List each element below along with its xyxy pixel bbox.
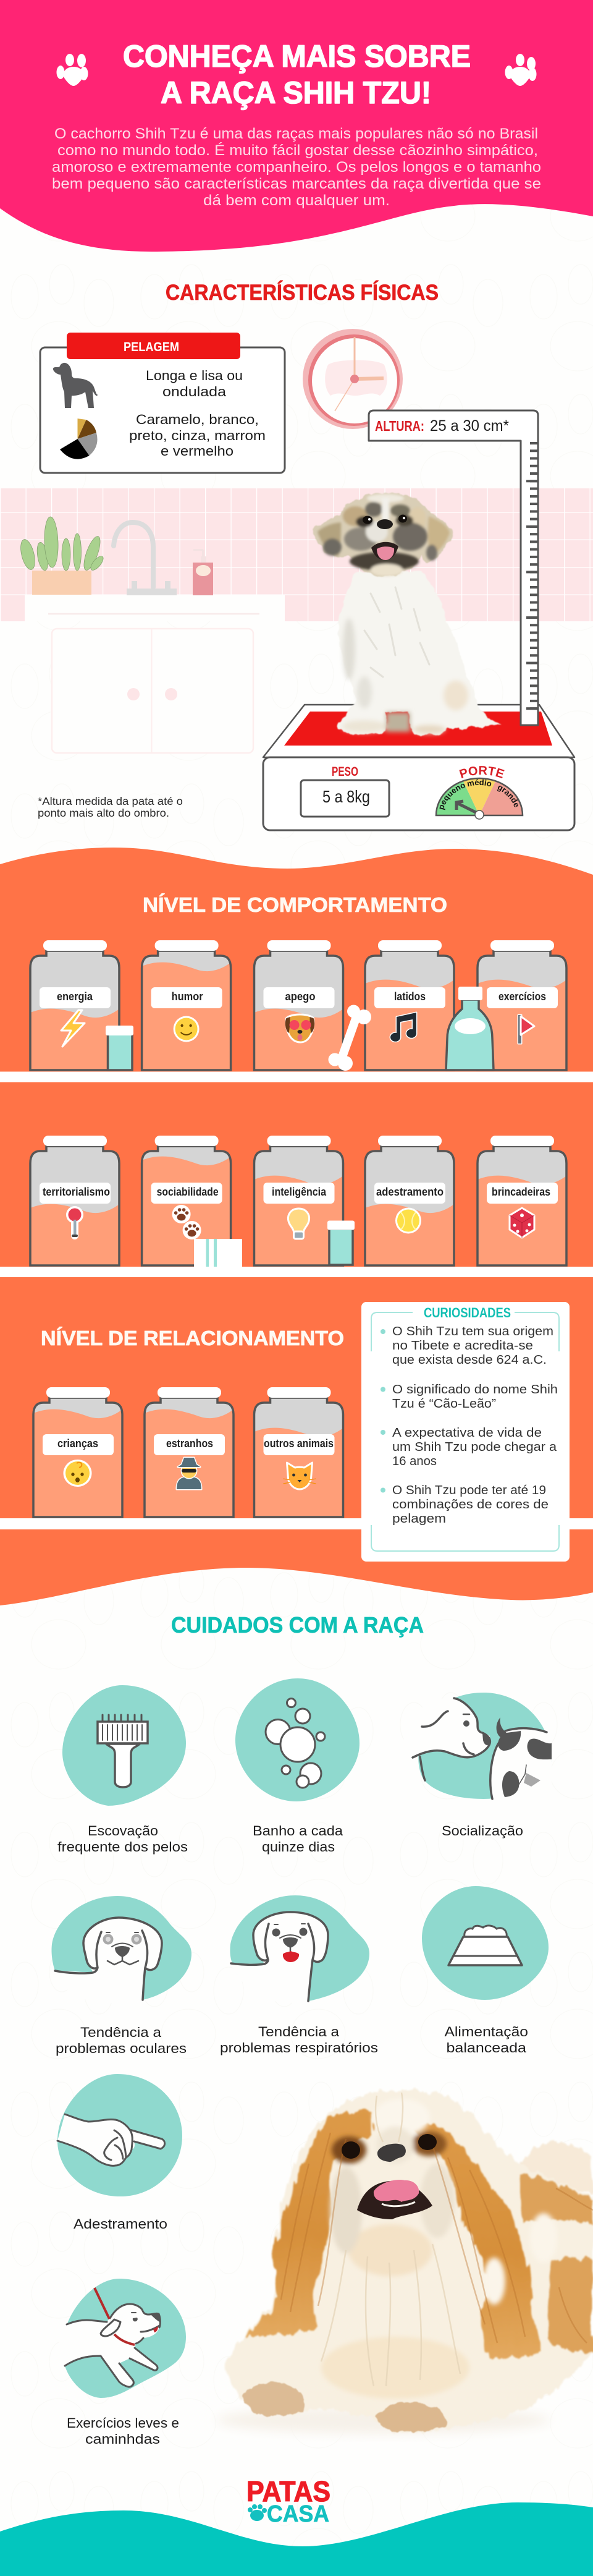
fact: combinações de cores: O Shih Tzu pode ter até 19 [392,1484,546,1497]
altura text: 25 a 30 cm* [430,417,509,435]
icon: dog on leash [59,2288,160,2387]
jar: estranhos [145,1387,233,1517]
jar: apego [254,940,343,1070]
porte gauge: grande [497,785,518,807]
photo: long haired shih tzu lying [216,2090,593,2434]
jar: outros animais [254,1387,343,1517]
photo: small shih tzu sitting [313,493,500,735]
jar: brincadeiras [477,1136,566,1265]
counter and cabinet [25,595,285,753]
dog fur base [226,2090,593,2433]
dog back [518,2141,593,2195]
icon: dog with red mouth [231,1912,328,2003]
label: quinze dias [262,1839,335,1855]
icon: tennis ball [395,1208,421,1234]
icon: bone [329,1005,371,1071]
logo: patas da casa: PATAS [246,2475,330,2507]
icon: pin [66,1206,83,1239]
title: CONHEÇA MAIS SOBRE [123,39,471,74]
fact: expectativa de vida: um Shih Tzu pode chegar a [392,1440,557,1454]
fact: origem: no Tibete e acredita-se [392,1339,533,1353]
intro paragraph: dá bem com qualquer um. [203,192,390,209]
icon: spy [177,1458,201,1489]
icon: food bowl [448,1926,522,1965]
dog head [313,493,452,576]
icon: dog with cloudy eyes [52,1918,162,2003]
label: balanceada [446,2040,527,2055]
intro paragraph [52,125,541,209]
teal pill bottle, shelf one [106,1026,133,1070]
kitchen wall tiles [0,488,593,621]
hair strands [281,2133,593,2343]
footnote: ponto mais alto do ombro. [38,807,169,819]
intro paragraph: O cachorro Shih Tzu é uma das raças mais populares não só no Brasil [54,125,538,142]
dog soft shading [321,2099,557,2399]
text: coat type: Longa e lisa ou [146,368,243,383]
dog mouth and tongue [357,2180,432,2219]
jar: apego: apego [285,990,315,1003]
label [56,2025,187,2056]
weighing scale [262,704,576,831]
logo: patas da casa [246,2475,330,2527]
care: adestramento [57,2074,182,2232]
jar: latidos: latidos [394,990,426,1003]
icon: cat [283,1463,316,1489]
icon: logo paw [248,2504,267,2521]
jar: territorialismo [30,1136,119,1265]
white gift box [194,1239,242,1267]
footnote [38,795,183,819]
porte gauge: pequeno [439,784,465,810]
teal footer wave [0,2502,593,2576]
icon: paw prints [172,1205,201,1239]
right golden hair [411,2123,540,2359]
icon: faucet [114,522,177,595]
care: problemas oculares [52,1896,191,2056]
care: exercícios leves [59,2279,186,2447]
peso label: PESO [332,765,358,779]
panel: curiosidades [361,1302,570,1562]
altura text [375,417,509,435]
jar: energia [30,940,119,1070]
heading: nível de comportamento: NÍVEL DE COMPORTAMENTO [143,893,447,916]
fact: combinações de cores: combinações de cores de [392,1498,549,1511]
text: coat colours: preto, cinza, marrom [129,428,266,443]
icon: right paw [505,54,536,86]
icon: smiley [174,1016,200,1042]
porte gauge: médio [467,779,492,786]
fact: expectativa de vida: 16 anos [392,1455,437,1468]
icon: potted plant [18,517,106,595]
icon: dog with heart eyes [285,1014,314,1042]
label: Socialização [442,1823,523,1838]
jar: latidos [365,940,454,1070]
dog paws [243,2383,446,2431]
teal shampoo bottle [446,987,494,1070]
label: frequente dos pelos [57,1839,188,1855]
title: A RAÇA SHIH TZU! [161,75,431,110]
label [57,1823,188,1855]
jar: crianças [33,1387,122,1517]
right body gold [519,2174,593,2225]
jar: adestramento: adestramento [376,1186,444,1198]
icon: white dog [402,1698,490,1780]
jar: inteligência: inteligência [272,1186,327,1198]
label: Escovação [88,1823,158,1838]
jar: outros animais: outros animais [264,1437,334,1450]
label [445,2024,528,2055]
icon: soap bottle [193,549,213,595]
shelf three [0,1518,593,1529]
heading: cuidados com a raça: CUIDADOS COM A RAÇA [171,1612,424,1638]
fact: origem: O Shih Tzu tem sua origem [392,1325,553,1338]
icon: lightning [61,1010,85,1047]
header panel [0,0,593,252]
text: coat colours: e vermelho [161,443,233,459]
text: coat colours: Caramelo, branco, [136,412,259,427]
text: coat colours [129,412,266,459]
care: problemas respiratórios [220,1895,378,2055]
jar: sociabilidade [142,1136,231,1265]
label: Exercícios leves e [67,2415,179,2431]
orange behaviour panel [0,848,593,1605]
jar: inteligência [254,1136,343,1265]
jar: territorialismo: territorialismo [43,1186,110,1198]
fact: origem: que exista desde 624 a.C. [392,1353,547,1367]
icon: baby [63,1460,91,1487]
label: caminhdas [85,2431,160,2447]
curiosidades title: CURIOSIDADES [424,1305,511,1320]
jar: sociabilidade: sociabilidade [157,1186,219,1198]
intro paragraph: bem pequeno são características marcantes da raça divertida que se [52,176,541,192]
icon: pointing hand [57,2114,165,2166]
title [123,39,471,110]
care: socialização [402,1693,552,1838]
peso display [301,780,389,817]
label: Tendência a [80,2025,162,2040]
intro paragraph: amoroso e extremamente companheiro. Os pelos longos e o tamanho [52,159,541,176]
label: Tendência a [258,2024,340,2039]
icon: wall clock [303,329,403,429]
icon: left paw [57,54,88,86]
panel: pelagem [40,333,285,473]
label: Alimentação [445,2024,528,2039]
dog eyes and nose [342,2134,437,2162]
jar: brincadeiras: brincadeiras [492,1186,550,1198]
icon: die [510,1208,534,1238]
panel: pelagem: PELAGEM [124,340,179,354]
fact: significado: Tzu é “Cão-Leão” [392,1397,496,1411]
label: problemas oculares [56,2041,187,2056]
jar: exercícios [477,940,566,1070]
care: banho [235,1678,360,1855]
icon: colour pie [60,419,98,459]
fact: expectativa de vida: A expectativa de vida de [392,1426,542,1440]
jar: crianças: crianças [57,1437,98,1450]
dog body [338,572,500,735]
label [220,2024,378,2055]
care: alimentação [422,1886,549,2055]
label [67,2415,179,2447]
text: coat type [146,368,243,399]
jar: exercícios: exercícios [498,990,546,1003]
footnote: *Altura medida da pata até o [38,795,183,807]
jar: humor: humor [172,990,203,1003]
icon: dog silhouette [53,363,98,408]
label: Adestramento [74,2216,167,2232]
fact: origem [392,1325,553,1367]
text: coat type: ondulada [162,384,227,399]
fact: combinações de cores [392,1484,549,1526]
logo: patas da casa: CASA [267,2501,329,2527]
icon: spotted dog [490,1717,552,1799]
shelf two [0,1267,593,1277]
icon: bubbles [266,1699,325,1788]
care: escovação [57,1685,188,1855]
fact: significado: O significado do nome Shih [392,1383,558,1396]
fact: significado [392,1383,558,1411]
bullets [381,1329,385,1492]
icon: flag [518,1015,534,1044]
left golden hair [245,2111,372,2337]
heading: características físicas: CARACTERÍSTICAS FÍSICAS [166,280,439,305]
height ruler [369,410,538,725]
altura text: ALTURA: [375,418,424,434]
shelf one [0,1072,593,1082]
label: Banho a cada [253,1823,343,1838]
jar: adestramento [365,1136,454,1265]
porte gauge: PORTE [460,766,505,778]
icon: light bulb [288,1209,309,1239]
icon: brush [98,1715,148,1787]
heading: nível de relacionamento: NÍVEL DE RELACIONAMENTO [41,1327,344,1350]
jar: estranhos: estranhos [166,1437,213,1450]
jar: energia: energia [57,990,93,1003]
fact: combinações de cores: pelagem [392,1512,446,1526]
label [253,1823,343,1855]
peso display: 5 a 8kg [322,787,370,806]
icon: music notes [390,1013,416,1042]
label: problemas respiratórios [220,2040,378,2055]
fact: expectativa de vida [392,1426,557,1468]
intro paragraph: como no mundo todo. É muito fácil gostar desse cãozinho simpático, [57,142,538,159]
porte gauge [435,766,524,820]
jar: humor [142,940,231,1070]
teal pill bottle, shelf two [327,1220,355,1265]
